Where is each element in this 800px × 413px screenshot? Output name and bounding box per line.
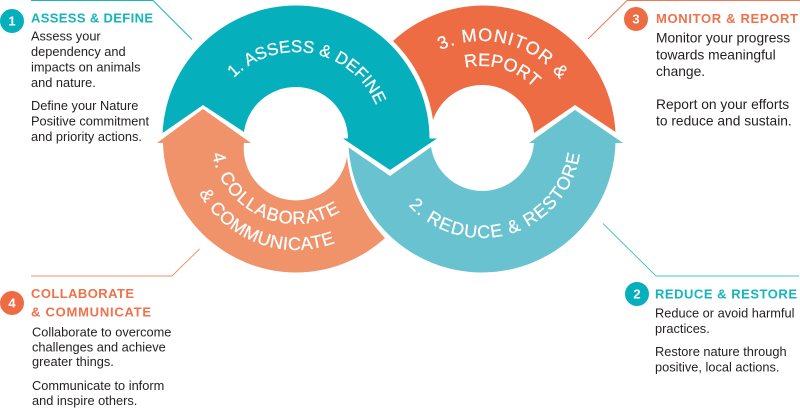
connector: collaborate and communicate (31, 249, 200, 276)
heading: & COMMUNICATE (31, 305, 151, 320)
body text (31, 29, 149, 144)
arc label: monitor and report: 3. MONITOR & (438, 28, 567, 80)
body text: and inspire others. (32, 393, 137, 408)
body text: Monitor your progress (656, 31, 790, 46)
body text: Communicate to inform (32, 378, 164, 393)
panel: reduce and restore (625, 282, 797, 375)
body text: and nature. (31, 75, 96, 90)
body text: Assess your (31, 29, 101, 44)
connector: assess and define (31, 0, 192, 40)
badge 1: 1 (8, 14, 16, 29)
body text: change. (656, 64, 705, 79)
body text: to reduce and sustain. (656, 114, 792, 129)
badge 2: 2 (633, 287, 641, 302)
heading (31, 286, 151, 320)
segment: assess and define (163, 5, 437, 170)
body text: Report on your efforts (656, 97, 789, 112)
body text: dependency and (31, 44, 126, 59)
heading: ASSESS & DEFINE (31, 11, 153, 26)
body text: practices. (655, 321, 710, 336)
body text: Restore nature through (655, 344, 787, 359)
heading: REDUCE & RESTORE (655, 287, 797, 302)
heading: COLLABORATE (31, 286, 134, 301)
connector: reduce and restore (603, 224, 799, 276)
body text: Collaborate to overcome (32, 325, 171, 340)
body text: greater things. (32, 354, 114, 369)
body text: Positive commitment (31, 114, 149, 128)
connector: monitor and report (588, 0, 800, 39)
body text: Reduce or avoid harmful (655, 306, 794, 321)
arc label: collaborate and communicate: & COMMUNICATE (200, 190, 335, 250)
body text (656, 31, 792, 129)
body text: and priority actions. (31, 129, 142, 144)
body text (32, 325, 171, 408)
badge 4: 4 (8, 296, 16, 311)
body text: towards meaningful (656, 47, 776, 62)
arc label: collaborate and communicate (200, 153, 340, 250)
panel: assess and define (0, 9, 153, 144)
segment: collaborate and communicate (157, 109, 385, 272)
body text: challenges and achieve (32, 340, 166, 354)
arc label: collaborate and communicate: 4. COLLABORATE (214, 153, 340, 224)
badge 4 (0, 291, 24, 315)
badge 1 (0, 9, 24, 33)
arc label: assess and define: 1. ASSESS & DEFINE (228, 40, 386, 105)
badge 3: 3 (632, 12, 640, 27)
body text: positive, local actions. (655, 360, 779, 375)
body text: Define your Nature (31, 98, 138, 113)
segment: monitor and report (393, 5, 616, 133)
heading: MONITOR & REPORT (656, 11, 798, 26)
body text (655, 306, 794, 375)
badge 2 (625, 282, 649, 306)
diagram: four-stage cycle (157, 6, 623, 272)
panel: monitor and report (624, 7, 798, 129)
arc label: reduce and restore: 2. REDUCE & RESTORE (408, 152, 580, 238)
badge 3 (624, 7, 648, 31)
segment: reduce and restore (348, 110, 623, 273)
arc label: monitor and report: REPORT (464, 53, 542, 85)
panel: collaborate and communicate (0, 286, 171, 408)
body text: impacts on animals (31, 60, 141, 74)
